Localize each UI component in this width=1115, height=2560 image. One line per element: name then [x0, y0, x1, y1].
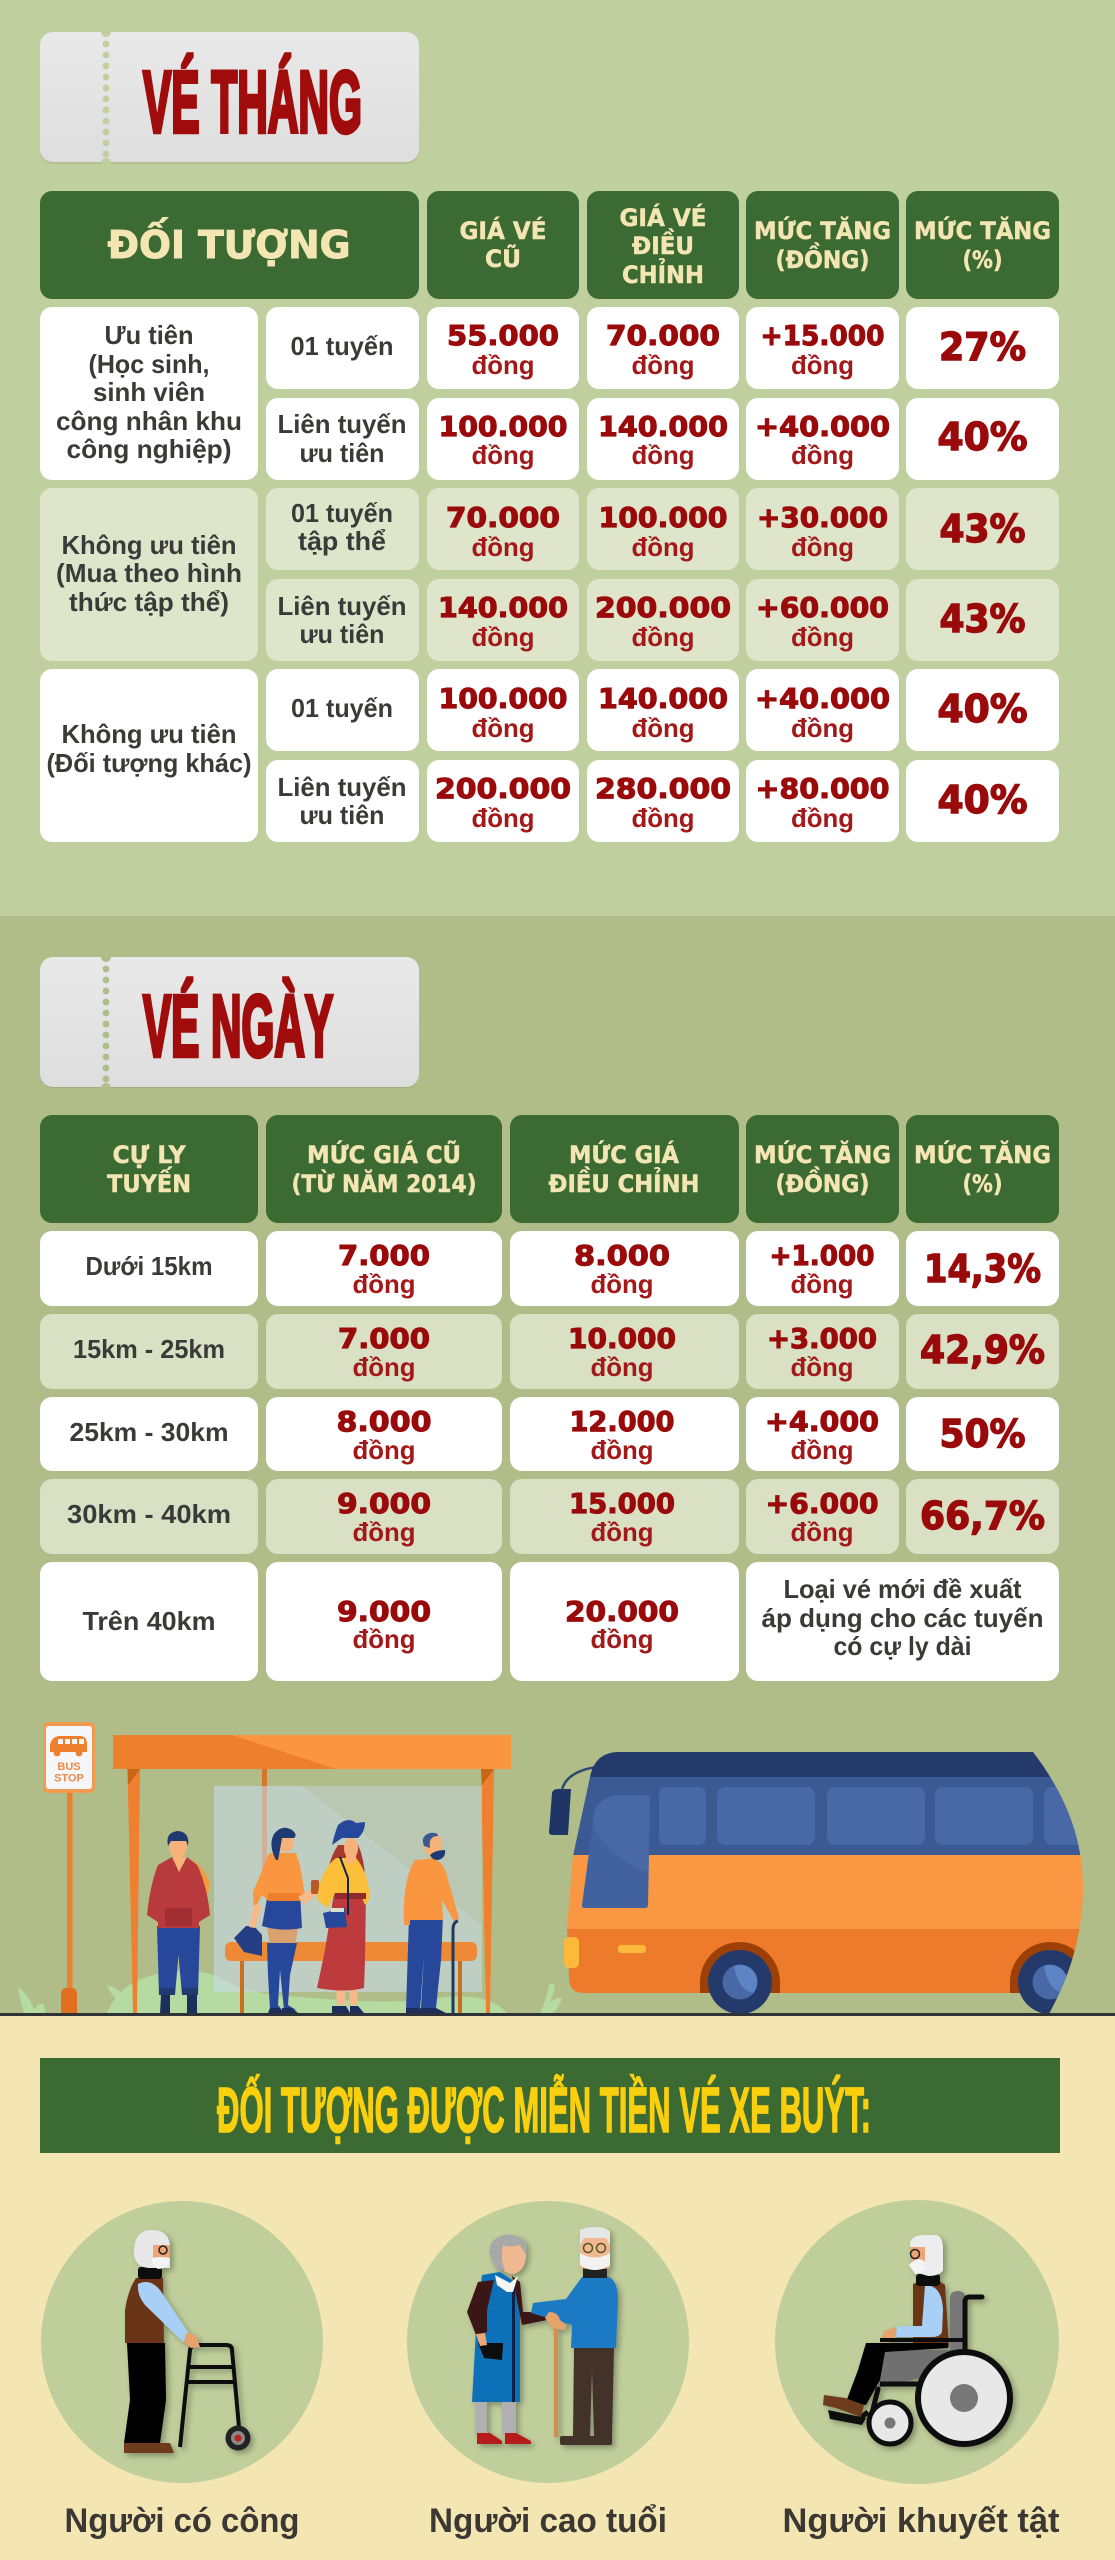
row: 25km to 30km: 8.000	[336, 1405, 432, 1438]
row: 15km to 25km: +3.000	[767, 1322, 877, 1355]
row: over 40km	[40, 1562, 1059, 1681]
row: other, single route: 01 tuyến	[291, 693, 393, 723]
row: priority, multi route: 100.000	[438, 410, 568, 443]
row: 25km to 30km: +4.000	[765, 1405, 879, 1438]
row: priority, single route: 70.000	[606, 319, 720, 352]
row: collective, single route: đồng	[472, 532, 534, 562]
row: priority, single route: +15.000	[760, 319, 884, 352]
row: 30km to 40km: đồng	[590, 1517, 654, 1547]
row: 30km to 40km: 9.000	[337, 1487, 431, 1520]
row: 30km to 40km: 15.000	[569, 1487, 675, 1520]
row: priority, single route: đồng	[791, 350, 854, 380]
row: collective, multi route: +60.000	[756, 591, 889, 624]
table header row: daily: CỰ LY	[112, 1141, 186, 1169]
group: priority passengers	[40, 307, 258, 480]
row: 30km to 40km: 30km - 40km	[67, 1499, 231, 1529]
row: 25km to 30km: 12.000	[570, 1405, 674, 1438]
row: over 40km: có cự ly dài	[834, 1631, 972, 1661]
row: other, single route: đồng	[472, 713, 534, 743]
group: non-priority collective purchase	[40, 488, 258, 661]
group: priority passengers: Ưu tiên	[104, 320, 194, 350]
group: non-priority other passengers: (Đối tượng khác)	[46, 748, 252, 778]
group: priority passengers: sinh viên	[93, 377, 205, 407]
row: priority, single route: 01 tuyến	[290, 331, 394, 361]
row: collective, single route: 43%	[940, 507, 1026, 551]
passenger: woman with hat in red skirt	[317, 1820, 369, 2013]
row: under 15km: 8.000	[574, 1239, 670, 1272]
table header row: monthly: ĐIỀU	[632, 227, 694, 260]
row: collective, multi route: 140.000	[438, 591, 568, 624]
row: other, multi route	[266, 760, 1059, 842]
row: over 40km: đồng	[352, 1624, 416, 1654]
table header row: monthly: GIÁ VÉ	[620, 203, 706, 232]
table header row: daily: MỨC GIÁ CŨ	[307, 1139, 461, 1169]
row: 30km to 40km: 66,7%	[920, 1494, 1045, 1538]
group: non-priority collective purchase: thức tập thể)	[69, 587, 229, 617]
row: other, multi route: đồng	[791, 803, 854, 833]
card: người khuyết tật	[775, 2200, 1060, 2540]
heading ticket: VÉ NGÀY: VÉ NGÀY	[143, 978, 333, 1075]
bus stop sign	[43, 1722, 95, 2013]
bus	[549, 1752, 1104, 2014]
row: collective, single route: 70.000	[446, 501, 560, 534]
row: 30km to 40km: đồng	[790, 1517, 854, 1547]
icon: man in wheelchair	[823, 2235, 1010, 2444]
row: 30km to 40km: đồng	[352, 1517, 416, 1547]
row: priority, multi route: đồng	[472, 440, 534, 470]
row: collective, multi route: 43%	[940, 597, 1026, 641]
row: priority, multi route: +40.000	[755, 410, 890, 443]
group: priority passengers: công nhân khu	[56, 406, 242, 436]
icon: elderly couple	[467, 2227, 618, 2445]
passenger: woman in orange top	[234, 1828, 320, 2013]
plants and bushes	[18, 1971, 562, 2013]
row: collective, multi route: Liên tuyến	[278, 591, 406, 621]
row: other, single route: đồng	[632, 713, 694, 743]
row: under 15km: +1.000	[770, 1239, 874, 1272]
icon: man with walker	[124, 2230, 250, 2453]
group: priority passengers: công nghiệp)	[66, 434, 232, 464]
row: other, single route	[266, 669, 1059, 751]
row: collective, single route: 01 tuyến	[291, 498, 393, 528]
row: under 15km: 14,3%	[924, 1247, 1041, 1291]
row: priority, single route: đồng	[632, 350, 694, 380]
row: other, multi route: ưu tiên	[300, 800, 384, 830]
table header row: monthly: CŨ	[485, 243, 521, 273]
row: 25km to 30km: đồng	[352, 1435, 416, 1465]
table header row: daily: MỨC TĂNG	[914, 1139, 1051, 1169]
row: priority, multi route: 140.000	[598, 410, 728, 443]
row: 15km to 25km: đồng	[790, 1352, 854, 1382]
row: 25km to 30km: 50%	[940, 1412, 1026, 1456]
row: other, multi route: 200.000	[435, 772, 571, 805]
row: collective, multi route	[266, 579, 1059, 661]
bus stop sign: STOP	[54, 1772, 84, 1784]
row: collective, single route	[266, 488, 1059, 570]
row: 15km to 25km: đồng	[352, 1352, 416, 1382]
row: priority, multi route: ưu tiên	[300, 438, 384, 468]
row: other, single route: 40%	[938, 687, 1028, 731]
row: other, single route: +40.000	[755, 682, 890, 715]
row: priority, multi route: 40%	[938, 415, 1028, 459]
group: non-priority other passengers	[40, 669, 258, 842]
row: under 15km: 7.000	[338, 1239, 430, 1272]
row: 15km to 25km: 10.000	[568, 1322, 676, 1355]
row: 15km to 25km: 42,9%	[920, 1328, 1045, 1372]
heading ticket: VÉ THÁNG: VÉ THÁNG	[143, 54, 362, 151]
row: priority, multi route: đồng	[791, 440, 854, 470]
banner title	[40, 2058, 1060, 2153]
row: 30km to 40km: +6.000	[766, 1487, 878, 1520]
row: over 40km: 20.000	[565, 1595, 679, 1628]
table header row: monthly: MỨC TĂNG	[914, 215, 1051, 245]
label: Người có công	[64, 2502, 300, 2540]
row: priority, single route: 27%	[939, 325, 1026, 369]
bus stop sign: BUS	[57, 1761, 81, 1773]
table header row: daily: ĐIỀU CHỈNH	[548, 1165, 700, 1198]
row: priority, single route	[266, 307, 1059, 389]
table header row: daily: (ĐỒNG)	[776, 1165, 870, 1198]
row: over 40km: áp dụng cho các tuyến	[762, 1603, 1044, 1633]
row: other, multi route: đồng	[472, 803, 534, 833]
label: Người cao tuổi	[429, 2502, 667, 2540]
row: under 15km: đồng	[352, 1269, 416, 1299]
row: 15km to 25km: đồng	[590, 1352, 654, 1382]
illustration: bus stop scene	[18, 1722, 1104, 2014]
table header row: monthly	[40, 191, 1059, 299]
row: 15km to 25km	[40, 1314, 1059, 1389]
row: 15km to 25km: 15km - 25km	[73, 1334, 225, 1364]
table header row: monthly: GIÁ VÉ	[460, 216, 546, 245]
row: 25km to 30km	[40, 1397, 1059, 1471]
row: other, single route: đồng	[791, 713, 854, 743]
row: collective, single route: tập thể	[298, 526, 386, 556]
label: Người khuyết tật	[782, 2502, 1060, 2540]
row: priority, multi route: Liên tuyến	[278, 409, 406, 439]
group: non-priority collective purchase: (Mua theo hình	[56, 558, 242, 588]
shelter	[113, 1735, 511, 2013]
row: other, multi route: 40%	[938, 778, 1028, 822]
row: over 40km: đồng	[590, 1624, 654, 1654]
panel: monthly ticket section	[0, 0, 1115, 916]
row: collective, single route: đồng	[791, 532, 854, 562]
table header row: daily: TUYẾN	[107, 1165, 191, 1198]
row: over 40km: Loại vé mới đề xuất	[784, 1574, 1022, 1604]
row: collective, single route: đồng	[632, 532, 694, 562]
row: other, single route: 100.000	[438, 682, 568, 715]
passenger: elderly man with cane	[404, 1833, 459, 2013]
table header row: monthly: ĐỐI TƯỢNG	[108, 218, 350, 267]
row: 25km to 30km: đồng	[590, 1435, 654, 1465]
card: người có công	[41, 2201, 323, 2540]
row: priority, single route: đồng	[472, 350, 534, 380]
group: non-priority collective purchase: Không ưu tiên	[62, 530, 236, 560]
row: other, single route: 140.000	[598, 682, 728, 715]
row: other, multi route: Liên tuyến	[278, 772, 406, 802]
row: priority, multi route	[266, 398, 1059, 480]
row: over 40km: Trên 40km	[82, 1606, 216, 1636]
row: 25km to 30km: 25km - 30km	[70, 1417, 228, 1447]
row: collective, multi route: ưu tiên	[300, 619, 384, 649]
group: priority passengers: (Học sinh,	[88, 349, 210, 379]
heading ticket: VÉ THÁNG	[40, 27, 419, 168]
panel: fare-exempt passengers	[0, 2013, 1115, 2560]
table header row: daily: (%)	[962, 1170, 1002, 1198]
row: collective, single route: +30.000	[757, 501, 888, 534]
row: under 15km: Dưới 15km	[86, 1251, 212, 1281]
table header row: monthly: (%)	[962, 246, 1002, 274]
row: collective, multi route: đồng	[472, 622, 534, 652]
heading ticket: VÉ NGÀY	[40, 952, 419, 1093]
row: under 15km	[40, 1231, 1059, 1306]
row: 15km to 25km: 7.000	[338, 1322, 430, 1355]
panel: daily ticket section	[0, 916, 1115, 2016]
row: other, multi route: đồng	[632, 803, 694, 833]
table header row: daily	[40, 1115, 1059, 1223]
row: other, multi route: +80.000	[756, 772, 890, 805]
row: 30km to 40km	[40, 1479, 1059, 1554]
table header row: daily: MỨC TĂNG	[754, 1139, 891, 1169]
row: collective, multi route: đồng	[791, 622, 854, 652]
row: other, multi route: 280.000	[595, 772, 731, 805]
passenger: man in red hoodie	[147, 1831, 210, 2013]
card: người cao tuổi	[407, 2201, 689, 2540]
group: non-priority other passengers: Không ưu tiên	[62, 719, 236, 749]
table header row: monthly: CHỈNH	[622, 256, 704, 289]
table header row: monthly: (ĐỒNG)	[776, 241, 870, 274]
row: collective, multi route: 200.000	[595, 591, 731, 624]
row: over 40km: 9.000	[337, 1595, 431, 1628]
row: under 15km: đồng	[790, 1269, 854, 1299]
row: priority, multi route: đồng	[632, 440, 694, 470]
row: under 15km: đồng	[590, 1269, 654, 1299]
row: 25km to 30km: đồng	[790, 1435, 854, 1465]
table header row: daily: MỨC GIÁ	[569, 1139, 679, 1169]
table header row: daily: (TỪ NĂM 2014)	[292, 1168, 476, 1198]
row: collective, multi route: đồng	[632, 622, 694, 652]
row: priority, single route: 55.000	[447, 319, 559, 352]
table header row: monthly: MỨC TĂNG	[754, 215, 891, 245]
row: collective, single route: 100.000	[598, 501, 728, 534]
